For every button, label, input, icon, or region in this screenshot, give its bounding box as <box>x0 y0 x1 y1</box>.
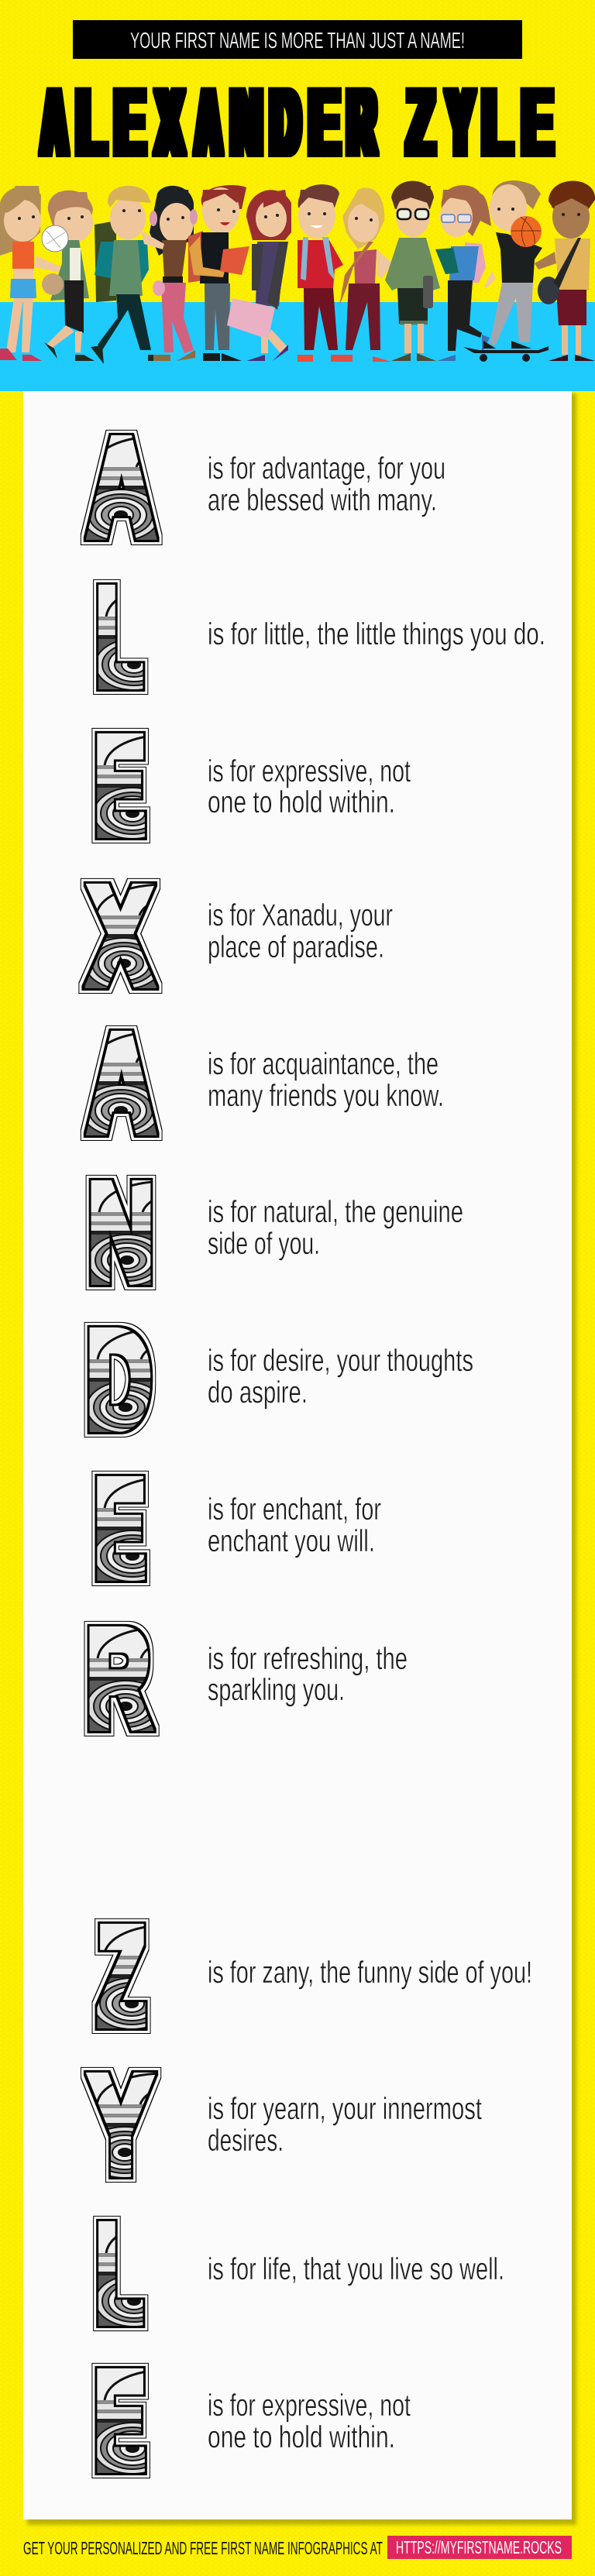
description text: is for expressive, not <box>208 2389 411 2423</box>
illustrated letter L: L <box>96 2198 143 2350</box>
person 3: boy with cap and backpack <box>91 186 170 364</box>
person 12: boy in yellow tank top <box>535 180 595 361</box>
person 8: blonde girl <box>331 187 393 362</box>
illustrated letter R: R <box>87 1603 150 1755</box>
person 9: boy with glasses and green sweater <box>385 181 440 361</box>
description text: is for enchant, for <box>208 1492 381 1527</box>
description text: are blessed with many. <box>208 483 437 517</box>
illustrated letter E: E <box>95 2345 145 2497</box>
main white panel with shadow <box>23 391 576 2525</box>
row A: acquaintance <box>88 1008 444 1159</box>
person 2: girl in green jacket with volleyball <box>42 191 95 361</box>
title: A <box>42 70 67 174</box>
description text: enchant you will. <box>208 1524 375 1558</box>
title: Z <box>408 70 434 174</box>
illustrated letter L: L <box>96 562 143 713</box>
person 7: boy in red shirt <box>298 184 351 362</box>
top banner with tagline <box>73 20 522 59</box>
title: E <box>309 70 339 174</box>
description text: is for refreshing, the <box>208 1642 408 1676</box>
description text: is for advantage, for you <box>208 452 445 486</box>
person 1: girl in orange top <box>0 186 60 361</box>
person 6: girl in purple sweater with pink bag <box>227 190 291 361</box>
illustrated letter E: E <box>95 1453 145 1605</box>
title: E <box>115 70 145 174</box>
description text: place of paradise. <box>208 930 384 964</box>
description text: one to hold within. <box>208 785 395 819</box>
row E: enchant <box>95 1453 381 1605</box>
row D: desire <box>87 1304 473 1456</box>
person 10: girl with ponytail and tablet <box>435 185 491 361</box>
row E: expressive <box>95 710 411 862</box>
title: D <box>270 70 300 174</box>
description text: is for expressive, not <box>208 754 411 788</box>
description text: is for Xanadu, your <box>208 898 393 933</box>
title: L <box>482 70 511 174</box>
row N: natural <box>88 1157 463 1309</box>
row X: Xanadu <box>90 860 393 1012</box>
title: X <box>156 70 183 174</box>
person 11: boy on skateboard with basketball <box>463 180 549 362</box>
row Z: zany <box>98 1901 532 2052</box>
description text: side of you. <box>208 1227 320 1261</box>
illustrated letter A: A <box>88 1008 154 1159</box>
row Y: yearn <box>91 2049 482 2201</box>
row E: expressive (last) <box>95 2345 411 2497</box>
description text: is for desire, your thoughts <box>208 1344 473 1378</box>
description text: many friends you know. <box>208 1079 444 1113</box>
person 5: boy with red hair reading a book <box>188 185 249 361</box>
description text: is for acquaintance, the <box>208 1047 439 1081</box>
illustrated letter N: N <box>88 1157 153 1309</box>
illustrated letter X: X <box>90 860 151 1012</box>
title: R <box>347 70 375 174</box>
row L: life <box>96 2198 504 2350</box>
description text: desires. <box>208 2124 284 2158</box>
row A: advantage <box>88 412 445 564</box>
person 4: girl with black hair and pink headphones <box>141 186 198 361</box>
title: A <box>196 70 221 174</box>
description text: is for yearn, your innermost <box>208 2092 482 2126</box>
description text: do aspire. <box>208 1376 308 1410</box>
description text: is for natural, the genuine <box>208 1195 463 1229</box>
description text: one to hold within. <box>208 2420 395 2454</box>
text: E <box>522 70 552 174</box>
title: Y <box>447 70 473 174</box>
row R: refreshing <box>87 1603 408 1755</box>
illustration: group of fourteen friends <box>0 180 595 364</box>
blue floor band <box>0 302 595 391</box>
illustrated letter D: D <box>87 1304 150 1456</box>
title: N <box>231 70 262 174</box>
description text: sparkling you. <box>208 1673 345 1707</box>
title: L <box>76 70 105 174</box>
row L: little <box>96 562 545 713</box>
illustrated letter E: E <box>95 710 145 862</box>
illustrated letter Y: Y <box>91 2049 151 2201</box>
illustrated letter Z: Z <box>98 1901 144 2052</box>
illustrated letter A: A <box>88 412 154 564</box>
